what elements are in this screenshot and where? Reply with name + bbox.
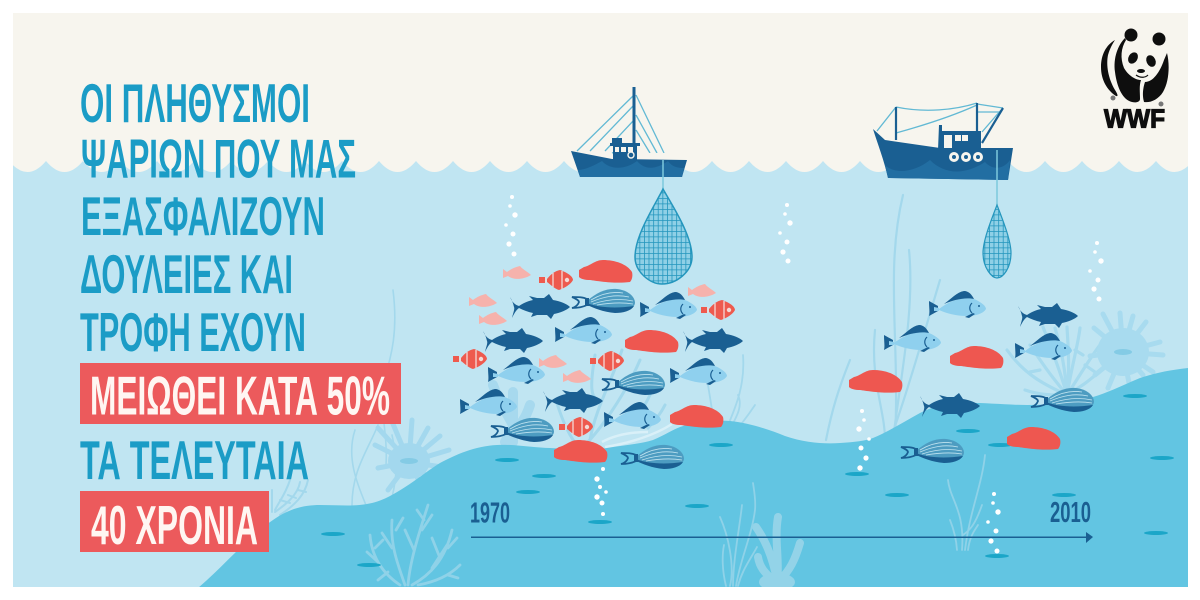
- year label 1970: 1970: [470, 498, 510, 530]
- windows: [944, 135, 968, 148]
- hull: [571, 151, 687, 177]
- net 1970: [635, 160, 692, 284]
- fish school 2010: [849, 291, 1094, 463]
- year label 2010: 2010: [1050, 497, 1091, 529]
- hull: [873, 129, 1013, 180]
- hull wave: [885, 160, 1010, 180]
- highlight: reduced by 50%: ΜΕΙΩΘΕΙ ΚΑΤΑ 50%: [90, 364, 390, 426]
- branching coral in right school: [1007, 327, 1108, 395]
- background seaweed and coral: [272, 195, 940, 515]
- bubbles: [504, 195, 1104, 554]
- headline text: ΕΞΑΣΦΑΛΙΖΟΥΝ: [81, 185, 325, 247]
- net 2010: [983, 150, 1011, 278]
- highlight: reduced by 50%: [80, 363, 401, 426]
- timeline arrow: [471, 532, 1093, 543]
- lobed coral in left school: [493, 385, 530, 442]
- headline text: ΟΙ ΠΛΗΘΥΣΜΟΙ: [80, 72, 310, 134]
- rope: [662, 160, 664, 190]
- headline text: [80, 72, 356, 363]
- sky with scalloped wave edge: [9, 13, 1193, 172]
- headline text: ΔΟΥΛΕΙΕΣ ΚΑΙ: [80, 243, 293, 305]
- highlight: 40 years: 40 ΧΡΟΝΙΑ: [91, 494, 258, 556]
- mast: [632, 87, 636, 147]
- seabed coral base: [759, 576, 795, 587]
- headline text: ΤΡΟΦΗ ΕΧΟΥΝ: [80, 301, 306, 363]
- seabed ripples: [321, 394, 1174, 567]
- rope: [996, 150, 998, 205]
- highlight: 40 years: [80, 491, 269, 556]
- seabed: [198, 368, 1188, 588]
- lit coral edge: [602, 424, 672, 447]
- headline continued: ΤΑ ΤΕΛΕΥΤΑΙΑ: [80, 429, 309, 491]
- fish school 1970: [453, 260, 743, 469]
- seabed kelp: centre: [720, 455, 985, 586]
- panda silhouette: [1101, 28, 1169, 106]
- fishing boat 2010: [873, 103, 1013, 180]
- water: [13, 161, 1188, 587]
- anemone left: [375, 420, 449, 492]
- WWF panda logo: [1101, 28, 1169, 134]
- net bag: [983, 205, 1011, 278]
- cabin: [610, 138, 640, 160]
- net bag: [635, 189, 692, 284]
- rigging: [877, 103, 1003, 133]
- anemone centre: [1114, 349, 1132, 355]
- seabed coral: left: [367, 505, 460, 585]
- deck: [637, 153, 667, 159]
- fishing boat 1970: [571, 87, 687, 177]
- cabin windows: [615, 147, 633, 152]
- lifebuoy: [628, 152, 634, 158]
- hull wave: [578, 161, 684, 177]
- lifebuoys: [950, 154, 982, 160]
- headline text: ΨΑΡΙΩΝ ΠΟΥ ΜΑΣ: [81, 128, 356, 190]
- masts: [896, 103, 1003, 148]
- wheelhouse: [938, 125, 981, 150]
- wordmark: WWF: [1104, 104, 1165, 134]
- rigging: [577, 95, 664, 153]
- anemone right: [1090, 313, 1163, 388]
- seabed coral: centre: [756, 517, 800, 585]
